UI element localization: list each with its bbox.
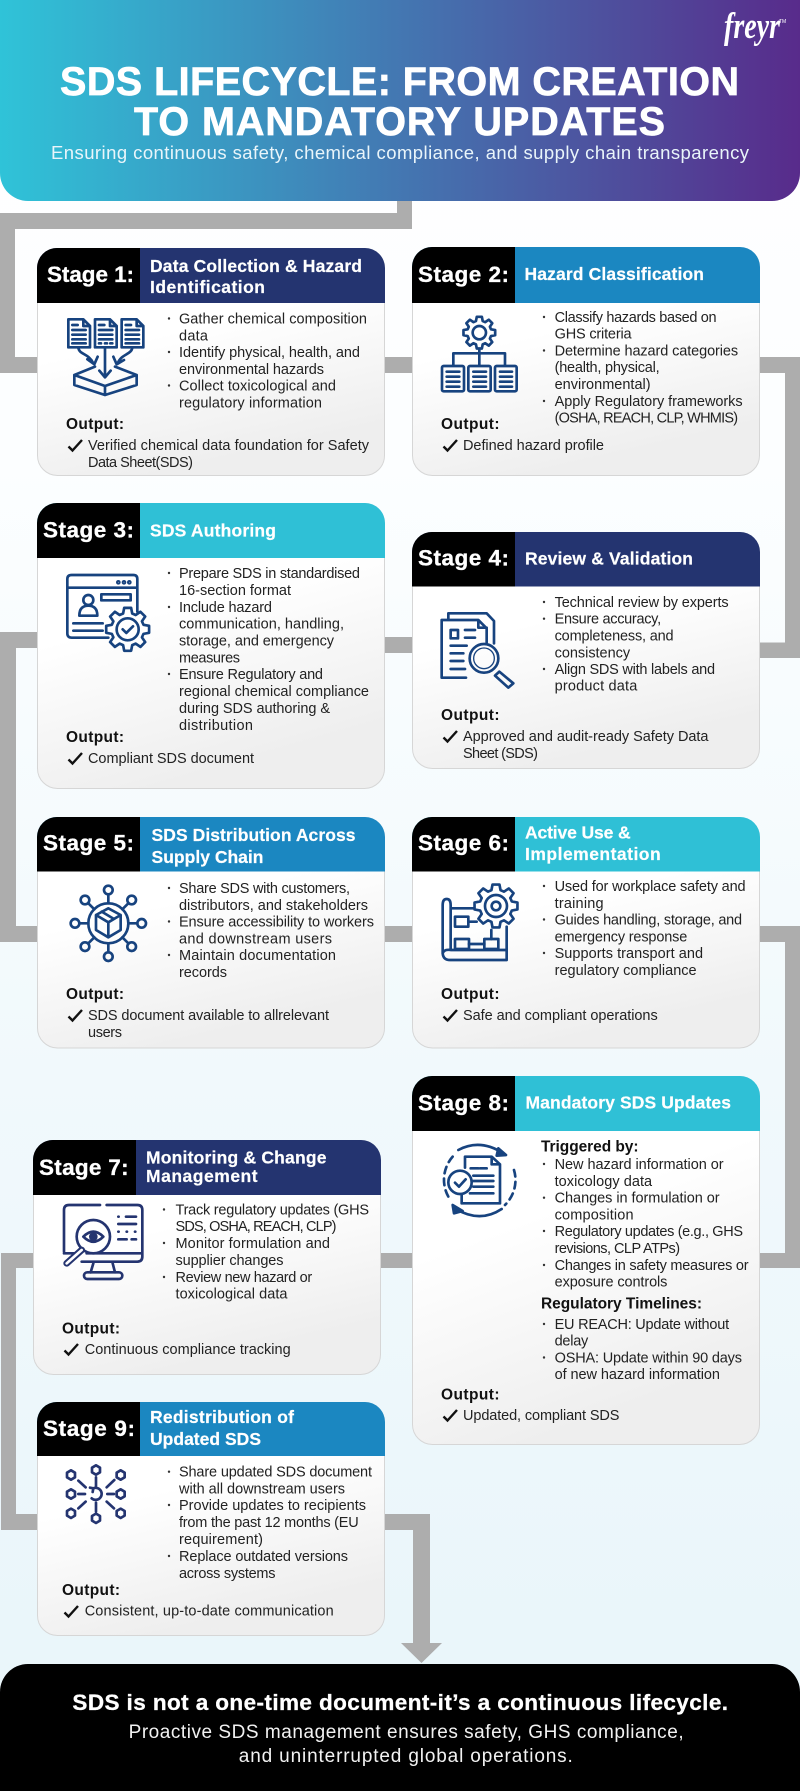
icon: gear and servers	[442, 317, 517, 391]
stage 1 bullets: Identify physical, health, and	[179, 345, 360, 361]
stage 3 output	[66, 729, 254, 767]
stage 6 header: Implementation	[525, 844, 661, 864]
panel: stage 2	[412, 247, 760, 476]
stage 7 bullets: toxicological data	[176, 1287, 288, 1303]
stage 6 bullets	[543, 879, 746, 979]
stage 6 bullets: Supports transport and	[555, 946, 703, 962]
stage 7 output	[62, 1320, 291, 1358]
panel: stage 3	[37, 503, 385, 788]
icon: network with package	[71, 886, 146, 961]
stage 5 output: SDS document available to allrelevant	[88, 1008, 329, 1024]
arrow to conclusion	[385, 1514, 442, 1663]
stage 1 bullets: environmental hazards	[179, 362, 324, 378]
icon: hexagon network	[67, 1465, 125, 1523]
stage 3 bullets: regional chemical compliance	[179, 684, 369, 700]
triggered by list: exposure controls	[555, 1275, 667, 1291]
stage 6 bullets: regulatory compliance	[555, 963, 697, 979]
stage 3 bullets: 16-section format	[179, 583, 291, 599]
triggered by list	[541, 1139, 749, 1291]
stage 2 output	[441, 416, 604, 454]
stage 5 bullets: Ensure accessibility to workers	[179, 914, 374, 930]
stage 4 output: Output:	[441, 707, 500, 724]
stage 8 header: Stage 8:	[418, 1090, 509, 1116]
panel: stage 8	[412, 1076, 760, 1444]
conclusion text: Proactive SDS management ensures safety, GHS compliance,	[129, 1722, 684, 1743]
stage 8 output: Output:	[441, 1387, 500, 1404]
stage 6 header: Stage 6:	[418, 831, 509, 856]
stage 9 bullets: across systems	[179, 1566, 276, 1582]
icon: monitor with magnifier	[64, 1205, 142, 1279]
stage 2 header: Hazard Classification	[524, 264, 704, 284]
stage 3 header	[37, 503, 385, 558]
subtitle: Ensuring continuous safety, chemical compliance, and supply chain transparency	[51, 142, 750, 163]
title: TO MANDATORY UPDATES	[134, 100, 665, 144]
icon: document with magnifier	[442, 613, 513, 688]
triggered by list: revisions, CLP ATPs)	[555, 1241, 680, 1257]
stage 2 header	[412, 247, 760, 303]
stage 3 bullets: distribution	[179, 718, 253, 734]
stage 6 output: Safe and compliant operations	[463, 1008, 658, 1024]
stage 9 output: Output:	[62, 1582, 120, 1599]
panel: stage 5	[37, 817, 385, 1048]
triggered by list: Triggered by:	[541, 1139, 638, 1156]
stage 9 bullets: Replace outdated versions	[179, 1549, 348, 1565]
stage 2 bullets: Apply Regulatory frameworks	[555, 394, 743, 410]
flow connector lines	[0, 201, 800, 1530]
stage 3 bullets: communication, handling,	[179, 616, 344, 632]
stage 3 header: Stage 3:	[43, 518, 134, 542]
stage 1 bullets: data	[179, 328, 209, 344]
stage 2 bullets: (health, physical,	[555, 360, 660, 376]
triggered by list: Changes in formulation or	[555, 1191, 720, 1207]
stage 4 output: Sheet (SDS)	[463, 746, 538, 762]
stage 5 bullets: Maintain documentation	[179, 948, 336, 964]
stage 9 bullets: from the past 12 months (EU	[179, 1515, 359, 1531]
stage 5 output: users	[88, 1025, 122, 1041]
stage 4 bullets: Align SDS with labels and	[555, 662, 715, 678]
stage 1 bullets: regulatory information	[179, 395, 322, 411]
regulatory timelines list: OSHA: Update within 90 days	[555, 1350, 742, 1366]
stage 6 bullets: Guides handling, storage, and	[555, 912, 742, 928]
stage 7 output: Output:	[62, 1320, 120, 1338]
stage 1 header: Identification	[150, 277, 265, 297]
stage 4 output: Approved and audit-ready Safety Data	[463, 729, 709, 745]
stage 1 header: Stage 1:	[47, 262, 134, 287]
stage 1 bullets	[168, 312, 367, 411]
stage 1 output	[66, 416, 370, 471]
stage 2 bullets	[543, 310, 743, 426]
stage 6 header	[412, 817, 760, 872]
stage 7 bullets: SDS, OSHA, REACH, CLP)	[176, 1219, 336, 1235]
stage 3 output: Compliant SDS document	[88, 751, 254, 767]
stage 2 bullets: GHS criteria	[555, 327, 633, 343]
stage 5 output	[66, 986, 329, 1041]
stage 9 header: Redistribution of	[150, 1407, 294, 1427]
stage 1 header	[37, 248, 385, 303]
stage 4 header: Stage 4:	[418, 546, 509, 571]
stage 9 header	[37, 1402, 385, 1456]
stage 6 bullets: Used for workplace safety and	[555, 879, 746, 895]
stage 5 header: Supply Chain	[152, 847, 264, 867]
regulatory timelines list: of new hazard information	[555, 1367, 720, 1383]
conclusion text	[129, 1722, 684, 1767]
stage 2 bullets: (OSHA, REACH, CLP, WHMIS)	[555, 410, 738, 426]
stage 7 header: Management	[146, 1166, 258, 1186]
stage 9 header: Stage 9:	[43, 1416, 135, 1441]
panel: stage 9	[37, 1402, 385, 1636]
stage 7 header: Stage 7:	[39, 1155, 129, 1180]
stage 3 bullets: measures	[179, 650, 240, 666]
stage 9 bullets: Share updated SDS document	[179, 1465, 372, 1481]
title: SDS LIFECYCLE: FROM CREATION	[60, 60, 739, 104]
stage 8 header	[412, 1076, 760, 1131]
logo: freyr: TM	[779, 19, 786, 25]
stage 3 output: Output:	[66, 729, 124, 746]
stage 4 output	[441, 707, 709, 762]
regulatory timelines list	[541, 1296, 742, 1383]
stage 6 bullets: training	[555, 896, 604, 912]
stage 5 header: SDS Distribution Across	[152, 825, 356, 845]
stage 2 output: Output:	[441, 416, 500, 433]
stage 7 header	[33, 1140, 381, 1195]
stage 1 output: Verified chemical data foundation for Safety	[88, 438, 370, 454]
stage 4 header	[412, 532, 760, 586]
stage 1 output: Data Sheet(SDS)	[88, 455, 193, 471]
stage 2 bullets: Determine hazard categories	[555, 344, 738, 360]
stage 8 header: Mandatory SDS Updates	[526, 1093, 731, 1113]
stage 7 header: Monitoring & Change	[146, 1148, 327, 1168]
stage 6 output: Output:	[441, 986, 500, 1003]
title	[60, 60, 739, 144]
stage 4 bullets	[543, 595, 729, 695]
stage 8 output	[441, 1387, 619, 1424]
stage 4 bullets: completeness, and	[555, 628, 674, 644]
triggered by list: toxicology data	[555, 1174, 653, 1190]
stage 3 bullets	[168, 566, 369, 734]
regulatory timelines list: EU REACH: Update without	[555, 1317, 729, 1333]
panel: stage 7	[33, 1140, 381, 1374]
regulatory timelines list: Regulatory Timelines:	[541, 1296, 702, 1312]
stage 7 output: Continuous compliance tracking	[85, 1342, 291, 1358]
panel: stage 6	[412, 817, 760, 1048]
stage 3 bullets: Include hazard	[179, 600, 272, 616]
stage 4 bullets: product data	[555, 679, 638, 695]
icon: profile window with gear	[67, 575, 149, 651]
triggered by list: Changes in safety measures or	[555, 1258, 749, 1274]
icon: document update cycle	[444, 1145, 515, 1216]
stage 9 bullets: Provide updates to recipients	[179, 1498, 366, 1514]
stage 1 header: Data Collection & Hazard	[150, 256, 362, 276]
stage 7 bullets: Monitor formulation and	[176, 1236, 330, 1252]
stage 2 bullets: Classify hazards based on	[555, 310, 717, 326]
stage 3 bullets: Ensure Regulatory and	[179, 667, 323, 683]
panel: stage 4	[412, 532, 760, 768]
stage 5 header: Stage 5:	[43, 831, 134, 856]
stage 2 bullets: environmental)	[555, 377, 651, 393]
stage 6 header: Active Use &	[525, 823, 631, 843]
stage 6 output	[441, 986, 658, 1024]
triggered by list: Regulatory updates (e.g., GHS	[555, 1224, 743, 1240]
conclusion headline: SDS is not a one-time document-it’s a continuous lifecycle.	[72, 1690, 728, 1715]
conclusion banner	[0, 1664, 800, 1791]
stage 9 bullets: with all downstream users	[178, 1482, 345, 1498]
triggered by list: composition	[555, 1208, 634, 1224]
stage 9 output	[62, 1582, 334, 1620]
stage 1 output: Output:	[66, 416, 124, 433]
stage 1 bullets: Collect toxicological and	[179, 379, 336, 395]
stage 9 bullets: requirement)	[179, 1532, 263, 1548]
stage 9 header: Updated SDS	[150, 1429, 261, 1449]
stage 3 header: SDS Authoring	[150, 520, 276, 540]
stage 4 bullets: consistency	[555, 646, 631, 662]
stage 5 header	[37, 817, 385, 872]
stage 2 header: Stage 2:	[418, 262, 509, 287]
stage 9 bullets	[168, 1465, 372, 1582]
stage 7 bullets: Track regulatory updates (GHS	[176, 1202, 369, 1218]
stage 7 bullets	[163, 1202, 369, 1303]
stage 5 bullets: Share SDS with customers,	[179, 881, 350, 897]
stage 3 bullets: storage, and emergency	[179, 634, 335, 650]
icon: documents into box	[68, 319, 143, 395]
stage 4 bullets: Technical review by experts	[555, 595, 729, 611]
stage 9 output: Consistent, up-to-date communication	[85, 1604, 334, 1620]
stage 1 bullets: Gather chemical composition	[179, 312, 367, 328]
stage 7 bullets: supplier changes	[176, 1253, 284, 1269]
conclusion text: and uninterrupted global operations.	[239, 1746, 573, 1767]
stage 5 bullets: and downstream users	[179, 932, 332, 948]
stage 4 header: Review & Validation	[525, 548, 693, 568]
stage 3 bullets: Prepare SDS in standardised	[179, 566, 360, 582]
stage 2 output: Defined hazard profile	[463, 438, 604, 454]
stage 8 output: Updated, compliant SDS	[463, 1408, 619, 1424]
regulatory timelines list: delay	[555, 1334, 589, 1350]
header banner	[0, 0, 800, 201]
icon: blueprint with gear	[443, 885, 517, 960]
stage 6 bullets: emergency response	[555, 930, 687, 946]
stage 7 bullets: Review new hazard or	[176, 1270, 312, 1286]
panel: stage 1	[37, 248, 385, 476]
stage 3 bullets: during SDS authoring &	[179, 701, 330, 717]
stage 5 bullets: records	[179, 965, 227, 981]
logo: freyr: freyr	[724, 6, 780, 47]
triggered by list: New hazard information or	[555, 1157, 724, 1173]
stage 5 output: Output:	[66, 986, 124, 1003]
stage 5 bullets	[168, 881, 374, 981]
stage 5 bullets: distributors, and stakeholders	[179, 898, 368, 914]
stage 4 bullets: Ensure accuracy,	[555, 612, 661, 628]
